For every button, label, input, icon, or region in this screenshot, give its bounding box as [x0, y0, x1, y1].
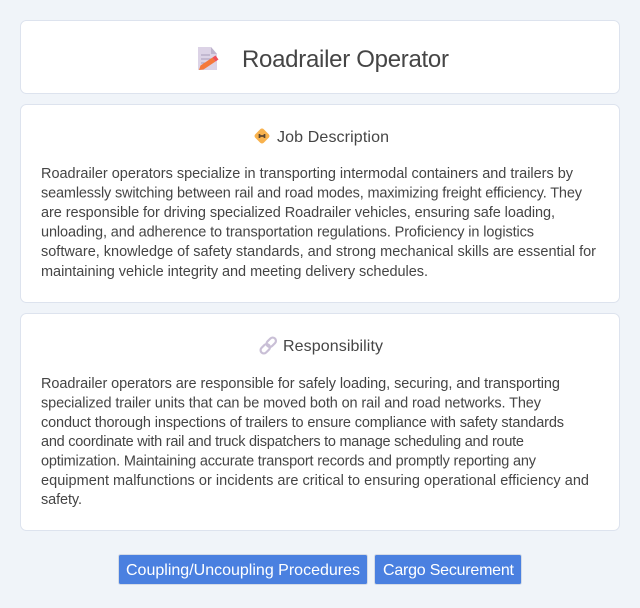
text block: responsibility: and coordinate with rail and truck dispatchers to manage scheduling and route	[41, 434, 524, 450]
icon: construction diamond	[254, 128, 270, 144]
text block: job description: software, knowledge of safety standards, and strong mechanical skills are essential for	[41, 244, 596, 260]
tag: cargo securement	[374, 554, 522, 584]
text block: job description: seamlessly switching between rail and road modes, maximizing freight efficiency. They	[41, 186, 583, 202]
text block: responsibility	[41, 376, 589, 508]
tag: coupling procedures: Coupling/Uncoupling Procedures	[126, 562, 360, 579]
text block: responsibility: optimization. Maintaining accurate transport records and promptly reporting any	[41, 454, 537, 470]
text block: responsibility: conduct thorough inspections of trailers to ensure compliance with safety standards	[41, 415, 564, 431]
text block: job description: unloading, and adherence to transportation regulations. Proficiency in logistics	[41, 224, 534, 240]
title: Roadrailer Operator	[242, 46, 449, 73]
tag: coupling procedures	[118, 554, 368, 584]
heading: responsibility: Responsibility	[283, 338, 383, 355]
text block: job description: are responsible for driving specialized Roadrailer vehicles, ensuring safe loading,	[41, 205, 555, 221]
text block: responsibility: Roadrailer operators are responsible for safely loading, securing, and transporting	[41, 376, 560, 392]
text block: job description	[41, 166, 596, 280]
tag: cargo securement: Cargo Securement	[383, 562, 515, 579]
panel: title header	[20, 20, 620, 94]
text block: responsibility: safety.	[41, 492, 82, 508]
panel: job description	[20, 104, 620, 302]
text block: responsibility: specialized trailer units that can be moved both on rail and road networks. They	[41, 396, 542, 412]
heading: job description: Job Description	[277, 129, 389, 146]
text block: responsibility: equipment malfunctions or incidents are critical to ensuring operational efficiency and	[41, 473, 589, 489]
panel: responsibility	[20, 314, 620, 530]
text block: job description: Roadrailer operators specialize in transporting intermodal containers and trailers by	[41, 166, 574, 182]
icon: memo with pencil	[198, 47, 218, 70]
text block: job description: maintaining vehicle integrity and meeting delivery schedules.	[41, 264, 428, 280]
icon: link	[259, 336, 277, 355]
